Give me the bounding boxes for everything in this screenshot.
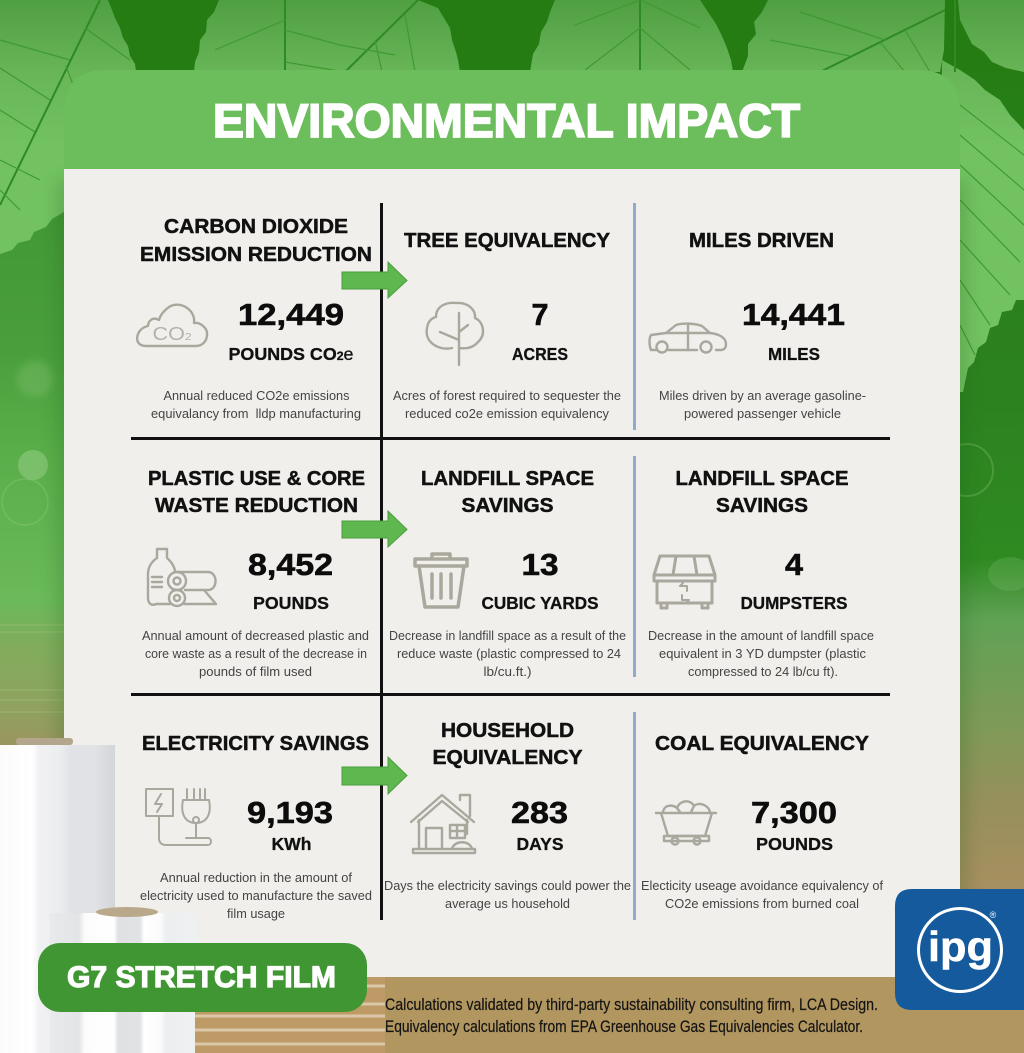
icon: CO2 cloud xyxy=(137,305,207,346)
icon: plug and power xyxy=(146,789,211,845)
icon: tree xyxy=(427,303,483,365)
panel: landfill space dumpsters: DUMPSTERS xyxy=(740,593,848,613)
panel: household equivalency: DAYS xyxy=(516,834,564,854)
panel: landfill space cubic yards: 13 xyxy=(522,547,558,582)
panel: miles driven: 14,441 xyxy=(742,297,845,332)
panel: electricity savings xyxy=(140,732,372,921)
arrow: row 3 xyxy=(342,757,407,794)
panel: household equivalency: EQUIVALENCY xyxy=(432,746,583,769)
panel: carbon dioxide: equivalancy from lldp manufacturing xyxy=(151,407,361,421)
panel: miles driven: MILES xyxy=(768,344,820,364)
panel: electricity savings: film usage xyxy=(227,907,285,921)
panel: miles driven xyxy=(650,229,866,421)
panel: landfill space dumpsters: Decrease in the amount of landfill space xyxy=(648,629,874,643)
panel: electricity savings: electricity used to manufacture the saved xyxy=(140,889,372,903)
panel: miles driven: MILES DRIVEN xyxy=(689,229,834,252)
panel: carbon dioxide: Annual reduced CO2e emissions xyxy=(164,389,350,403)
panel: plastic use: POUNDS xyxy=(253,593,329,613)
panel: carbon dioxide: 12,449 xyxy=(238,297,344,332)
panel: paper card xyxy=(64,70,960,977)
panel: carbon dioxide: POUNDS CO2e xyxy=(228,344,354,364)
paper shadow xyxy=(56,180,968,970)
panel: household equivalency xyxy=(384,719,631,911)
panel: tree equivalency: Acres of forest required to sequester the xyxy=(393,389,621,403)
badge: G7 stretch film: G7 STRETCH FILM xyxy=(67,961,336,994)
panel: landfill space dumpsters: compressed to 24 lb/cu ft). xyxy=(688,665,838,679)
panel: household equivalency: HOUSEHOLD xyxy=(441,719,574,742)
panel: household equivalency: average us household xyxy=(445,897,570,911)
panel: tree equivalency xyxy=(393,229,621,421)
panel: household equivalency: Days the electricity savings could power the xyxy=(384,879,631,893)
panel: landfill space cubic yards: Decrease in landfill space as a result of the xyxy=(389,629,626,643)
panel: landfill space cubic yards: reduce waste (plastic compressed to 24 xyxy=(397,647,621,661)
panel: landfill space cubic yards xyxy=(389,467,626,679)
panel: tree equivalency: ACRES xyxy=(512,344,568,364)
panel: coal equivalency: 7,300 xyxy=(751,795,837,830)
icon: bottle and rolls xyxy=(148,549,216,606)
panel: electricity savings: Annual reduction in the amount of xyxy=(160,871,353,885)
grid dividers xyxy=(131,203,890,920)
panel: plastic use xyxy=(142,467,369,679)
arrow: row 2 xyxy=(342,511,407,547)
title: ENVIRONMENTAL IMPACT xyxy=(213,94,800,147)
icon: CO2 cloud: CO 2 xyxy=(152,324,192,344)
panel: landfill space dumpsters: SAVINGS xyxy=(716,494,808,517)
panel: electricity savings: 9,193 xyxy=(247,795,333,830)
panel: tree equivalency: reduced co2e emission equivalency xyxy=(405,407,610,421)
icon: car xyxy=(650,324,726,352)
panel: landfill space dumpsters: LANDFILL SPACE xyxy=(676,467,848,490)
panel: plastic use: pounds of film used xyxy=(199,665,312,679)
panel: plastic use: core waste as a result of the decrease in xyxy=(145,647,367,661)
panel: landfill space cubic yards: LANDFILL SPACE xyxy=(421,467,594,490)
panel: tree equivalency: TREE EQUIVALENCY xyxy=(404,229,610,252)
footnote: Equivalency calculations from EPA Greenhouse Gas Equivalencies Calculator. xyxy=(385,1017,863,1036)
panel: plastic use: Annual amount of decreased plastic and xyxy=(142,629,369,643)
badge: G7 stretch film xyxy=(38,943,367,1012)
panel: landfill space dumpsters xyxy=(648,467,874,679)
footnote xyxy=(385,995,878,1036)
logo: ipg xyxy=(895,889,1024,1010)
panel: carbon dioxide xyxy=(137,215,372,421)
panel: plastic use: 8,452 xyxy=(248,547,333,582)
panel: tree equivalency: 7 xyxy=(532,297,548,332)
panel: carbon dioxide: EMISSION REDUCTION xyxy=(140,243,372,266)
panel: electricity savings: KWh xyxy=(272,834,312,854)
header band xyxy=(64,70,960,169)
panel: coal equivalency: CO2e emissions from burned coal xyxy=(665,897,859,911)
icon: coal cart xyxy=(656,801,716,844)
panel: carbon dioxide: CARBON DIOXIDE xyxy=(164,215,348,238)
panel: electricity savings: ELECTRICITY SAVINGS xyxy=(142,732,369,755)
arrow: row 1 xyxy=(342,262,407,298)
panel: landfill space cubic yards: SAVINGS xyxy=(462,494,554,517)
footnote: Calculations validated by third-party sustainability consulting firm, LCA Design. xyxy=(385,995,878,1014)
icon: house xyxy=(411,795,475,853)
image: stretch film rolls xyxy=(0,738,195,1053)
leaves xyxy=(0,0,1024,392)
panel: miles driven: Miles driven by an average gasoline- xyxy=(659,389,866,403)
panel: landfill space cubic yards: lb/cu.ft.) xyxy=(484,665,532,679)
icon: trash can xyxy=(415,554,467,607)
panel: household equivalency: 283 xyxy=(511,795,568,830)
panel: coal equivalency: POUNDS xyxy=(756,834,833,854)
logo: ipg: ® xyxy=(990,910,997,920)
panel: coal equivalency: COAL EQUIVALENCY xyxy=(655,732,869,755)
panel: coal equivalency: Electicity useage avoidance equivalency of xyxy=(641,879,884,893)
panel: landfill space dumpsters: 4 xyxy=(785,547,804,582)
panel: coal equivalency xyxy=(641,732,884,911)
panel: plastic use: PLASTIC USE & CORE xyxy=(148,467,365,490)
panel: plastic use: WASTE REDUCTION xyxy=(155,494,358,517)
icon: dumpster xyxy=(654,556,715,608)
panel: landfill space dumpsters: equivalent in 3 YD dumpster (plastic xyxy=(659,647,866,661)
logo: ipg: ipg xyxy=(928,923,993,970)
panel: landfill space cubic yards: CUBIC YARDS xyxy=(482,593,598,613)
panel: miles driven: powered passenger vehicle xyxy=(684,407,841,421)
wood strip at bottom xyxy=(0,977,1024,1053)
